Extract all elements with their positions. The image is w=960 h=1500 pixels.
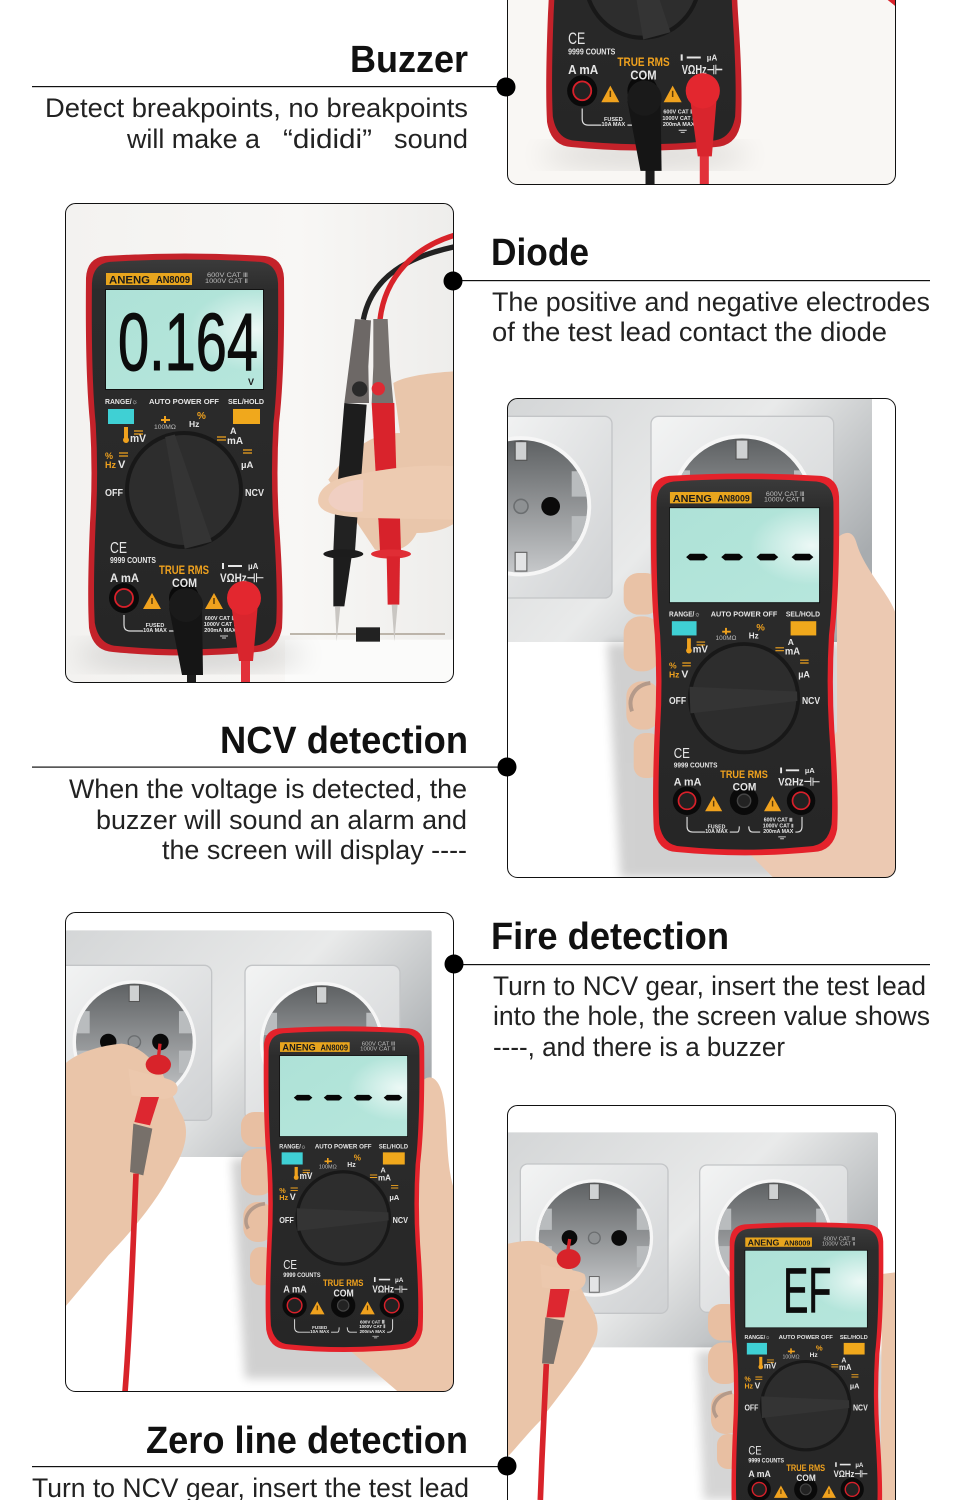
panel printing: 600V CAT Ⅲ xyxy=(764,817,793,824)
probe handle xyxy=(130,1097,159,1175)
callout line and dot: Fire detection xyxy=(444,954,930,974)
panel printing xyxy=(279,1041,409,1334)
panel printing: A mA xyxy=(110,571,139,585)
hand behind probes xyxy=(328,371,455,551)
fingers xyxy=(241,1112,274,1285)
panel printing: V xyxy=(681,669,688,680)
panel: fire detection photo xyxy=(55,912,455,1392)
panel printing: NCV xyxy=(393,1215,408,1225)
right socket xyxy=(678,434,806,476)
panel printing: 600V CAT Ⅲ xyxy=(362,1041,395,1047)
panel: zero line detection photo xyxy=(507,1105,896,1500)
right inner plate xyxy=(650,416,834,574)
thumbnail xyxy=(328,480,363,512)
panel printing: OFF xyxy=(669,696,686,707)
probe tip xyxy=(568,1239,570,1252)
thumb xyxy=(318,468,400,519)
multimeter with dashes xyxy=(651,473,839,855)
panel printing: mV xyxy=(693,645,708,656)
panel: buzzer photo xyxy=(507,0,900,195)
panel printing: µA xyxy=(798,669,810,679)
dial handle xyxy=(761,1393,849,1418)
panel printing: Hz xyxy=(749,631,759,640)
right inner plate xyxy=(700,1165,848,1312)
panel printing: A mA xyxy=(283,1284,307,1295)
panel printing: 1000V CAT Ⅱ xyxy=(764,497,805,504)
right hand edge xyxy=(880,1272,896,1500)
panel printing: ANENG xyxy=(748,1238,780,1248)
probe head xyxy=(557,1249,581,1269)
panel printing: 1000V CAT Ⅱ xyxy=(822,1241,855,1247)
panel printing: AN8009 xyxy=(156,275,190,286)
panel printing: VΩHz⊣⊢ xyxy=(778,776,820,789)
panel printing: A xyxy=(230,426,237,436)
red test lead xyxy=(686,73,720,195)
panel printing: mA xyxy=(785,646,800,657)
panel printing: CE xyxy=(568,30,585,48)
multimeter with leads xyxy=(544,0,743,195)
panel printing: SEL/HOLD xyxy=(379,1144,409,1150)
panel printing: µA xyxy=(248,562,259,571)
hand and test probes xyxy=(285,235,457,683)
meter shadow xyxy=(540,145,750,165)
meter shadow xyxy=(75,643,305,667)
text: Diode description: The positive and negative electrodes xyxy=(492,287,930,317)
panel printing: 1000V CAT Ⅱ xyxy=(360,1046,395,1052)
ring xyxy=(631,683,650,711)
panel printing: VΩHz⊣⊢ xyxy=(682,63,723,77)
heading: Zero line detection: Zero line detection xyxy=(146,1420,468,1462)
text: Diode description: of the test lead contact the diode xyxy=(492,317,887,347)
dial handle xyxy=(690,686,798,714)
left socket xyxy=(536,1179,653,1297)
wall sockets and hands xyxy=(55,930,455,1392)
panel printing: NCV xyxy=(802,696,820,707)
panel border: diode xyxy=(66,204,454,682)
LCD dashes xyxy=(294,1095,402,1101)
panel printing: % xyxy=(354,1153,361,1162)
panel printing: A xyxy=(380,1166,386,1175)
panel: diode photo xyxy=(65,203,457,698)
photo background xyxy=(65,912,454,1392)
panel printing: EF xyxy=(783,1256,831,1327)
ring xyxy=(714,1392,732,1417)
panel printing: mV xyxy=(130,433,147,445)
panel printing: OFF xyxy=(279,1215,294,1225)
panel printing: SEL/HOLD xyxy=(228,397,265,406)
panel printing: µA xyxy=(389,1193,400,1202)
text: Buzzer description: sound xyxy=(394,124,468,154)
red test lead xyxy=(227,581,261,682)
panel printing: 10A MAX xyxy=(143,628,167,634)
panel printing: VΩHz⊣⊢ xyxy=(220,571,264,585)
panel printing: 9999 COUNTS xyxy=(748,1457,784,1464)
thumb xyxy=(128,1069,178,1099)
socket plate xyxy=(65,930,432,1157)
text: Buzzer description: Detect breakpoints, no breakpoints xyxy=(45,93,468,123)
panel printing: 200mA MAX xyxy=(663,122,695,128)
photo background xyxy=(507,0,896,185)
panel printing: FUSED xyxy=(604,117,623,123)
panel printing xyxy=(669,491,820,835)
probe head xyxy=(146,1055,171,1075)
socket plate xyxy=(507,398,872,642)
panel printing: 600V CAT Ⅲ xyxy=(205,615,235,622)
photo background xyxy=(65,203,454,683)
multimeter with dashes xyxy=(264,1026,424,1352)
red wire corner xyxy=(888,0,895,6)
wires xyxy=(363,235,457,320)
panel printing: VΩHz⊣⊢ xyxy=(834,1469,868,1479)
panel printing: Hz xyxy=(279,1193,288,1202)
heading: Fire detection: Fire detection xyxy=(491,916,729,958)
panel printing: µA xyxy=(707,54,717,63)
panel printing: 100MΩ xyxy=(782,1354,800,1360)
shadow on wall xyxy=(697,1351,890,1500)
panel printing: µA xyxy=(855,1462,864,1469)
wall sockets xyxy=(498,398,895,878)
text: NCV description: buzzer will sound an alarm and xyxy=(96,805,467,835)
panel printing: SEL/HOLD xyxy=(840,1335,868,1341)
callout line and dot: NCV detection xyxy=(32,758,516,776)
panel printing: % xyxy=(279,1186,286,1195)
panel printing: µA xyxy=(395,1277,404,1284)
panel printing: RANGE/☼ xyxy=(745,1335,770,1341)
red probe xyxy=(371,319,411,641)
panel printing: 200mA MAX xyxy=(360,1329,385,1334)
panel printing: V xyxy=(118,459,126,471)
panel printing xyxy=(568,30,723,128)
black test lead xyxy=(627,80,662,190)
dial handle xyxy=(165,434,212,548)
black probe xyxy=(323,319,371,641)
panel printing: Hz xyxy=(105,460,116,470)
panel printing: 600V CAT Ⅲ xyxy=(360,1319,385,1324)
callout line and dot: Buzzer xyxy=(32,78,516,96)
panel printing: 600V CAT Ⅲ xyxy=(663,109,694,116)
panel printing: NCV xyxy=(245,487,264,499)
text: Diode description xyxy=(492,287,930,347)
panel printing: NCV xyxy=(853,1403,868,1412)
panel printing: CE xyxy=(674,745,690,762)
panel printing: 1000V CAT Ⅱ xyxy=(204,621,237,628)
left inner plate xyxy=(520,1164,668,1313)
heading: NCV detection: NCV detection xyxy=(220,720,468,762)
panel printing: AUTO POWER OFF xyxy=(711,610,778,618)
right socket xyxy=(260,982,383,1105)
test lead wire xyxy=(125,1174,136,1392)
panel printing: TRUE RMS xyxy=(617,56,670,69)
panel printing: OFF xyxy=(105,487,123,499)
panel printing: 9999 COUNTS xyxy=(110,556,157,565)
panel printing: COM xyxy=(733,781,756,793)
right socket xyxy=(715,1179,832,1297)
diode component xyxy=(290,627,445,642)
fingers xyxy=(708,1304,741,1469)
panel printing: mA xyxy=(839,1363,852,1372)
panel printing: TRUE RMS xyxy=(323,1278,363,1288)
probe handle xyxy=(542,1289,570,1364)
panel printing: 9999 COUNTS xyxy=(283,1272,321,1279)
text: NCV description: the screen will display ---- xyxy=(162,835,467,865)
panel printing: FUSED xyxy=(708,824,726,830)
left inner plate xyxy=(508,416,613,599)
panel printing: A xyxy=(841,1357,846,1364)
panel printing: ANENG xyxy=(282,1043,316,1053)
panel printing: COM xyxy=(333,1289,354,1300)
panel printing: TRUE RMS xyxy=(159,565,209,577)
panel printing: mA xyxy=(227,435,243,447)
shadow on wall xyxy=(232,1159,432,1379)
right inner plate xyxy=(245,965,400,1120)
text: Buzzer description: will make a xyxy=(126,124,261,154)
panel printing: COM xyxy=(796,1473,816,1483)
panel printing: FUSED xyxy=(146,623,164,629)
panel printing: V xyxy=(248,377,254,387)
dial handle xyxy=(642,28,670,40)
panel printing: AN8009 xyxy=(321,1043,349,1052)
panel printing: V xyxy=(755,1381,761,1391)
panel printing: A mA xyxy=(674,777,701,789)
panel printing: COM xyxy=(172,576,197,590)
panel printing: 10A MAX xyxy=(705,829,728,835)
right hand xyxy=(352,1077,455,1392)
panel printing: µA xyxy=(850,1382,860,1391)
panel printing: V xyxy=(290,1192,296,1202)
panel border: NCV detection xyxy=(508,398,896,878)
panel printing: 600V CAT Ⅲ xyxy=(766,491,805,498)
probe tip xyxy=(158,1044,160,1059)
panel border: fire detection xyxy=(66,912,454,1392)
panel printing: 10A MAX xyxy=(602,122,625,128)
dial handle xyxy=(297,1205,389,1231)
panel printing: % xyxy=(105,451,113,461)
panel printing: COM xyxy=(630,68,657,82)
panel printing xyxy=(105,272,265,634)
thumb xyxy=(540,1264,586,1291)
panel printing: TRUE RMS xyxy=(720,769,768,781)
left socket xyxy=(508,436,592,576)
panel printing: mV xyxy=(764,1360,777,1370)
panel printing: Hz xyxy=(810,1352,818,1359)
panel printing: ANENG xyxy=(673,494,712,505)
ring xyxy=(246,1204,265,1229)
panel printing: 1000V CAT Ⅱ xyxy=(763,822,794,829)
panel printing: 200mA MAX xyxy=(204,628,236,634)
text: Fire description: Turn to NCV gear, insert the test lead xyxy=(493,971,926,1001)
panel printing: FUSED xyxy=(312,1325,328,1330)
panel printing: mV xyxy=(299,1171,312,1181)
panel printing: µA xyxy=(241,460,253,471)
hand xyxy=(750,533,896,878)
panel printing: VΩHz⊣⊢ xyxy=(372,1284,408,1295)
LCD dashes xyxy=(686,554,813,560)
panel printing: 200mA MAX xyxy=(763,829,794,835)
panel printing: AN8009 xyxy=(784,1238,811,1247)
panel printing: 100MΩ xyxy=(319,1165,337,1171)
panel printing: A xyxy=(788,637,794,647)
panel printing: RANGE/☼ xyxy=(279,1144,306,1150)
panel printing: mA xyxy=(378,1173,391,1183)
table reflection xyxy=(346,640,453,682)
heading: Diode: Diode xyxy=(491,232,589,274)
callout line and dot: Diode xyxy=(444,272,930,290)
panel printing: CE xyxy=(283,1257,297,1272)
panel printing: A mA xyxy=(568,63,598,77)
text: Buzzer description: “dididi” xyxy=(283,124,372,154)
text: NCV description xyxy=(69,774,467,865)
panel printing: SEL/HOLD xyxy=(786,610,820,618)
fingers xyxy=(624,573,656,778)
photo background xyxy=(507,398,896,878)
panel printing: % xyxy=(816,1344,823,1353)
panel printing: Hz xyxy=(189,419,199,429)
callout line and dot: Zero line detection xyxy=(32,1456,516,1476)
multimeter reading EF xyxy=(730,1222,883,1500)
panel printing: % xyxy=(745,1377,752,1384)
text: NCV description: When the voltage is detected, the xyxy=(69,774,467,804)
panel border: zero line detection xyxy=(508,1106,896,1500)
panel printing: % xyxy=(669,661,677,671)
panel printing: TRUE RMS xyxy=(786,1463,825,1473)
panel: NCV detection photo xyxy=(508,399,895,877)
panel printing: % xyxy=(197,411,206,422)
panel printing: RANGE/☼ xyxy=(669,610,700,618)
panel printing: 1000V CAT Ⅱ xyxy=(662,115,695,122)
panel printing: % xyxy=(756,623,765,634)
panel printing: 10A MAX xyxy=(310,1329,329,1334)
panel printing: A mA xyxy=(748,1469,771,1479)
panel printing: ANENG xyxy=(109,274,150,286)
socket plate xyxy=(507,1132,878,1347)
panel printing: AUTO POWER OFF xyxy=(779,1335,833,1341)
panel printing: 1000V CAT Ⅱ xyxy=(359,1324,385,1329)
panel printing: 600V CAT Ⅲ xyxy=(824,1237,855,1243)
panel printing: 0.164 xyxy=(118,297,258,388)
panel printing: OFF xyxy=(745,1403,758,1412)
panel border: buzzer xyxy=(508,0,896,184)
panel printing: AUTO POWER OFF xyxy=(149,397,219,406)
panel printing: 600V CAT Ⅲ xyxy=(207,272,249,279)
panel printing: Hz xyxy=(745,1384,754,1391)
panel printing: 100MΩ xyxy=(716,635,737,642)
multimeter reading 0.164 xyxy=(86,254,284,698)
wall sockets and hands xyxy=(507,1132,896,1500)
panel printing xyxy=(744,1237,868,1483)
panel printing: RANGE/☼ xyxy=(105,397,138,406)
panel printing: CE xyxy=(110,540,127,557)
panel printing: AN8009 xyxy=(717,494,750,505)
left hand xyxy=(65,1044,186,1307)
text: Fire description: ----, and there is a buzzer xyxy=(493,1032,785,1062)
photo background xyxy=(507,1105,896,1500)
panel printing: Hz xyxy=(347,1162,356,1169)
shadow on wall xyxy=(607,643,840,878)
panel printing: µA xyxy=(805,766,815,775)
black test lead xyxy=(169,588,203,682)
panel printing: 9999 COUNTS xyxy=(674,760,717,769)
left hand xyxy=(507,1241,598,1457)
panel printing: 9999 COUNTS xyxy=(568,47,616,56)
left inner plate xyxy=(55,965,212,1120)
text: Fire description xyxy=(493,971,930,1062)
panel printing: AUTO POWER OFF xyxy=(315,1144,372,1150)
test lead wire xyxy=(540,1364,546,1500)
heading: Buzzer: Buzzer xyxy=(350,39,468,81)
panel printing: 100MΩ xyxy=(154,424,176,431)
panel printing: CE xyxy=(748,1443,762,1457)
text: Buzzer description xyxy=(45,93,468,154)
panel printing: 1000V CAT Ⅱ xyxy=(205,278,248,285)
left socket xyxy=(73,980,196,1104)
panel printing: Hz xyxy=(669,669,679,679)
text: Fire description: into the hole, the screen value shows xyxy=(493,1001,930,1031)
